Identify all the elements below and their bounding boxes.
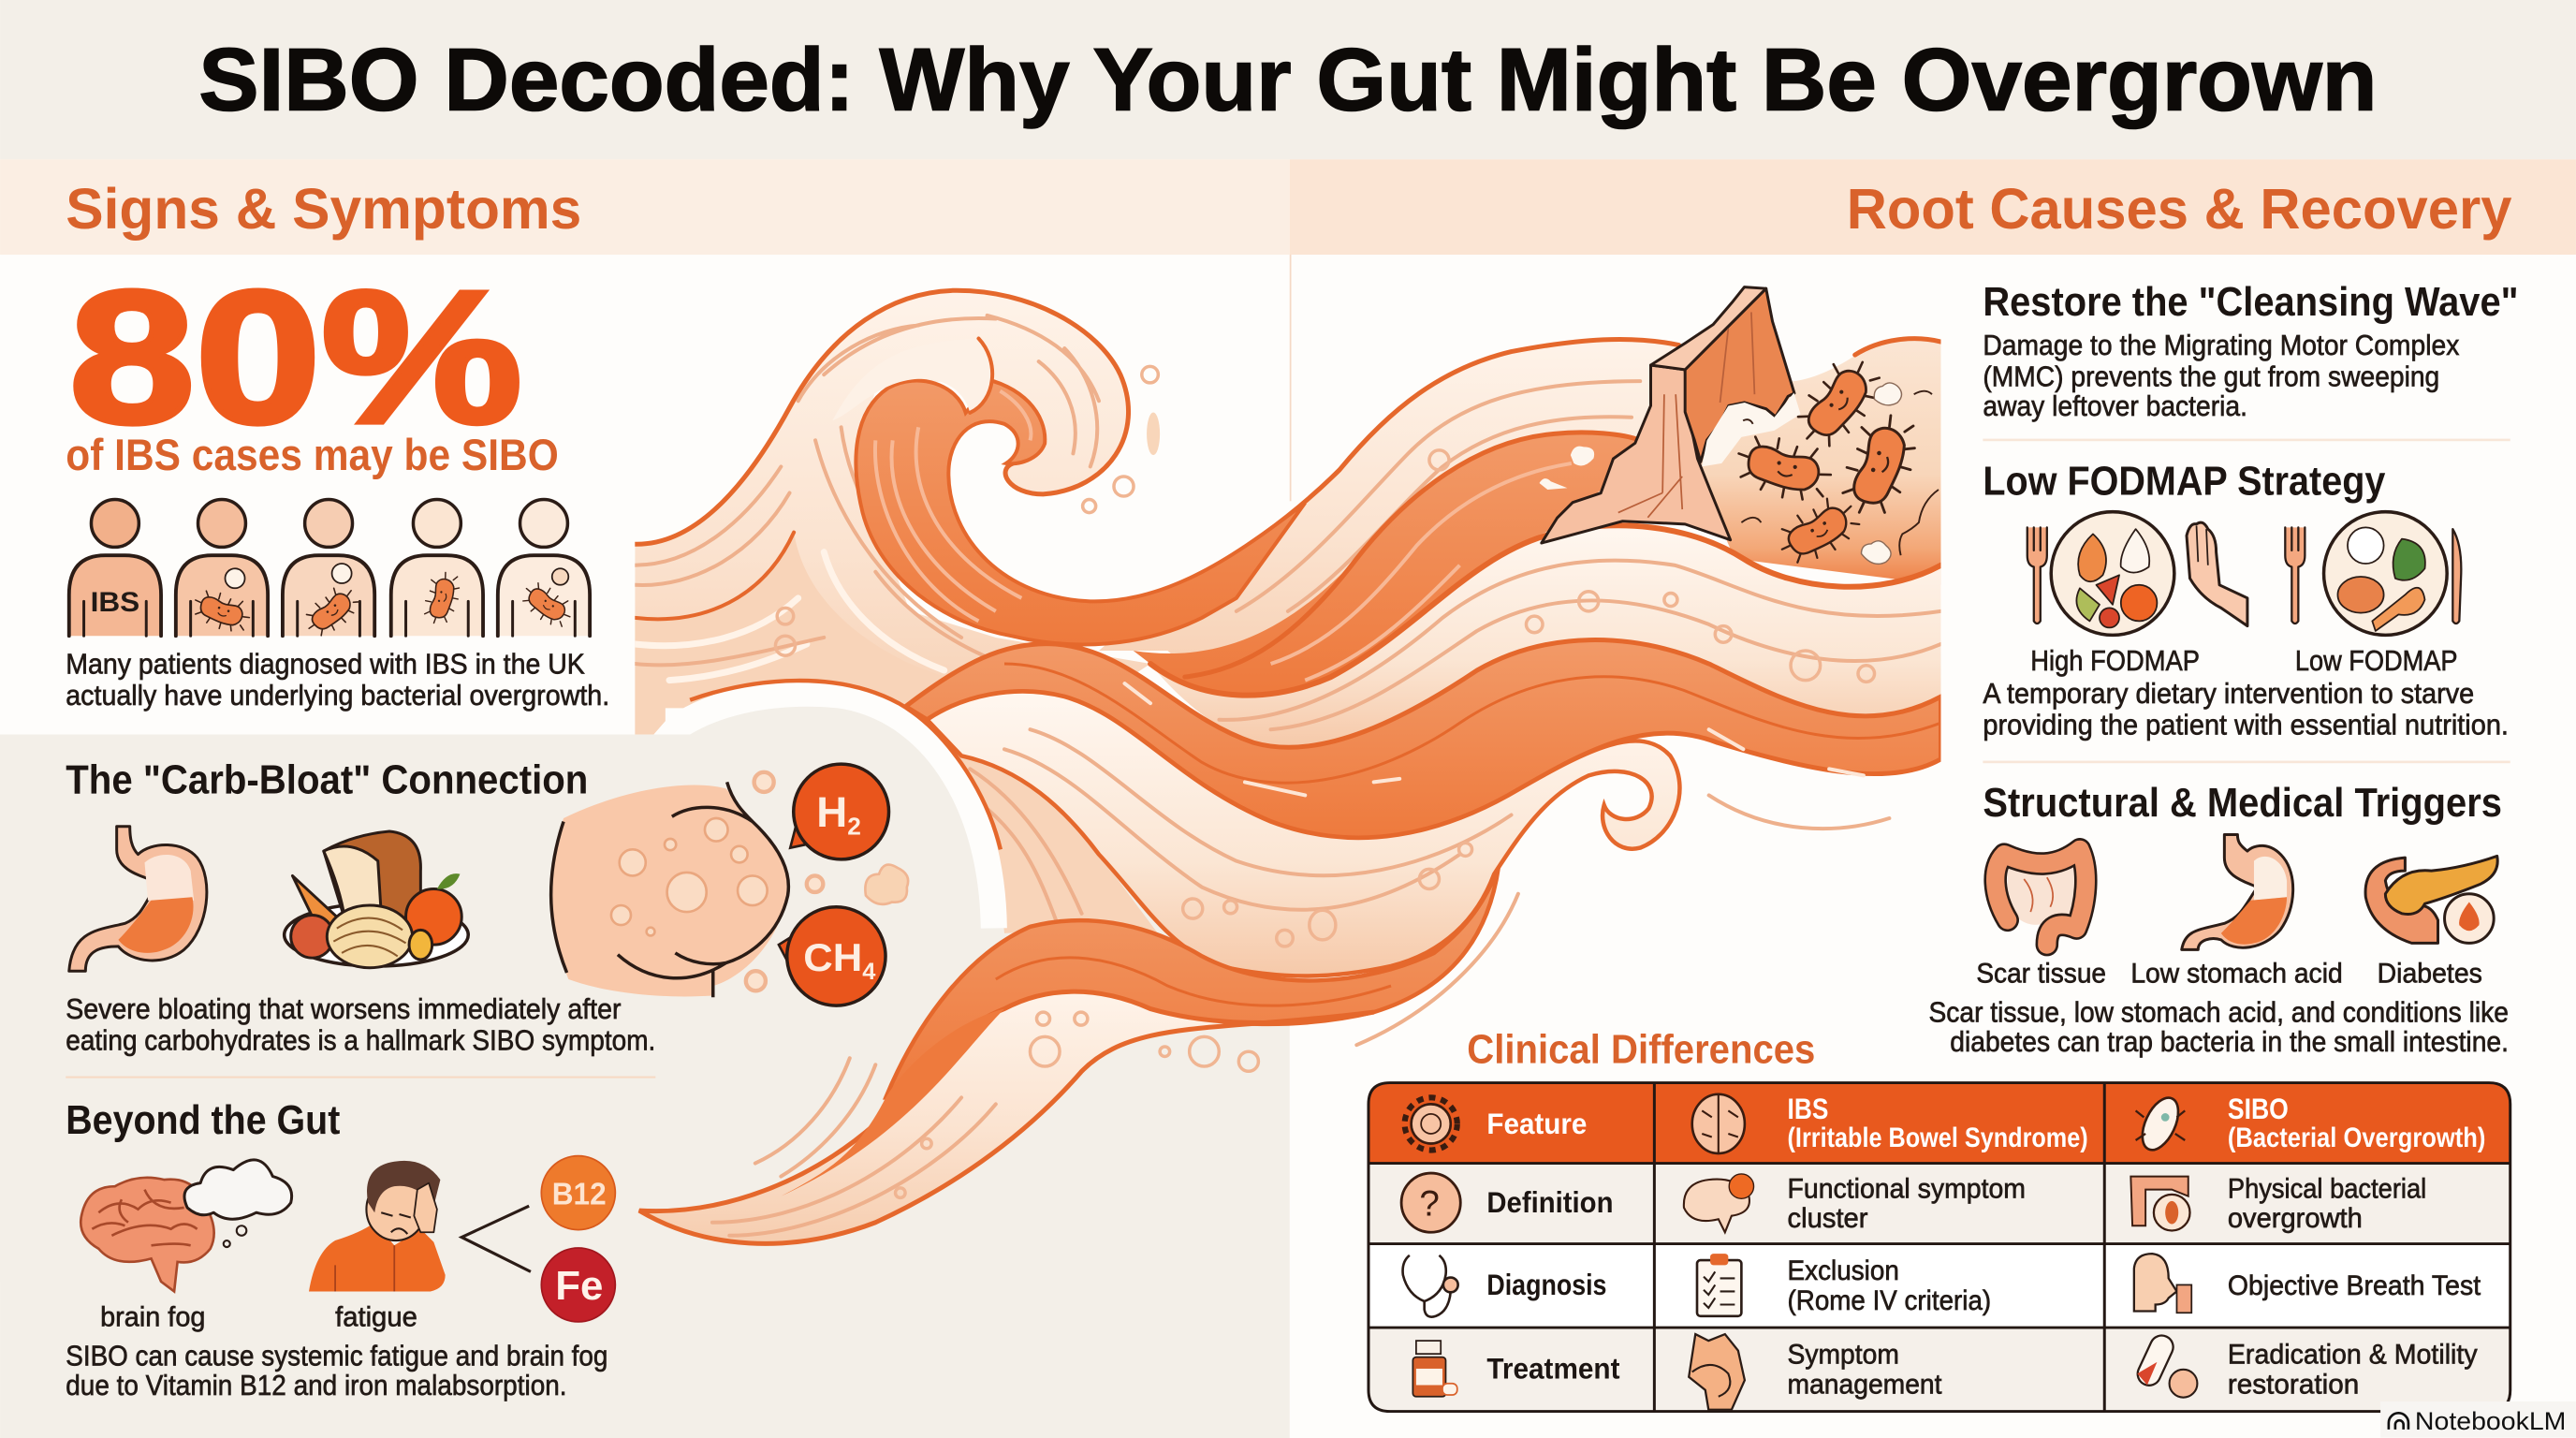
bacteria pocket and cliff — [1540, 287, 1939, 570]
icon: brain with question — [1684, 1174, 1754, 1232]
person: bacteria 1 — [176, 500, 268, 638]
icon: B12: B12 — [552, 1177, 607, 1211]
person: bacteria 2 — [283, 500, 374, 641]
left section header band — [0, 159, 1290, 255]
NotebookLM watermark — [2380, 1401, 2576, 1438]
icon: low FODMAP plate — [2285, 512, 2461, 635]
text: exclusion — [1788, 1255, 1991, 1316]
label: low stomach acid: Low stomach acid — [2130, 959, 2343, 990]
label: low FODMAP: Low FODMAP — [2295, 644, 2458, 677]
text: eradication and motility — [2228, 1340, 2478, 1400]
icon: brain with fog — [80, 1160, 292, 1291]
icon: stop hand — [2187, 522, 2247, 626]
wordmark: NotebookLM — [2415, 1406, 2566, 1435]
icon: colon — [1996, 849, 2086, 945]
white ring and bulge around bloated belly — [0, 681, 1001, 1282]
description — [1983, 677, 2509, 741]
gas puffs and debris — [1540, 383, 1939, 564]
heading: The "Carb-Bloat" Connection — [66, 757, 588, 803]
description: (MMC) prevents the gut from sweeping — [1983, 360, 2439, 392]
icon: torso with hands — [1689, 1334, 1745, 1410]
icon: carb food plate — [285, 831, 468, 968]
icon: gear — [1405, 1097, 1457, 1151]
header: IBS: IBS — [1788, 1092, 1828, 1125]
description: Scar tissue, low stomach acid, and conditions like — [1928, 996, 2509, 1029]
label: treatment: Treatment — [1486, 1351, 1620, 1385]
right section header band — [1290, 159, 2576, 255]
description: diabetes can trap bacteria in the small intestine. — [1950, 1025, 2509, 1058]
icon: pancreas with blood drop — [2365, 856, 2497, 943]
panel: 80 percent stat — [66, 251, 609, 712]
stat description — [66, 648, 609, 712]
icon: stomach — [2182, 835, 2293, 949]
heading: signs and symptoms: Signs & Symptoms — [66, 177, 581, 242]
panel: beyond the gut — [66, 1097, 615, 1401]
icon: bacterium — [2135, 1093, 2186, 1155]
arrow: links to deficiencies — [461, 1206, 531, 1271]
icon: CH4 gas bubble: 4 — [862, 960, 876, 985]
stat description: actually have underlying bacterial overgrowth. — [66, 679, 609, 712]
text: exclusion: Exclusion — [1788, 1255, 1899, 1286]
header: feature: Feature — [1486, 1107, 1587, 1140]
beyond the gut description: due to Vitamin B12 and iron malabsorption. — [66, 1369, 567, 1401]
text: symptom management: management — [1788, 1369, 1942, 1400]
heading: Low FODMAP Strategy — [1983, 458, 2386, 504]
big number: 80% — [69, 251, 522, 462]
icon: clipboard — [1697, 1254, 1741, 1316]
heading: root causes and recovery: Root Causes & Recovery — [1847, 177, 2511, 242]
description — [1928, 996, 2509, 1058]
table row: definition — [1401, 1173, 2426, 1234]
bacterium — [1730, 424, 1837, 510]
panel: low FODMAP strategy — [1983, 458, 2509, 741]
label: brain fog: brain fog — [100, 1301, 205, 1332]
beyond the gut description — [66, 1339, 607, 1401]
icon: CH4 gas bubble — [779, 907, 886, 1005]
icon: iron: Fe — [555, 1263, 603, 1309]
label: scar tissue: Scar tissue — [1976, 959, 2106, 990]
panel: restore the cleansing wave — [1983, 279, 2519, 422]
table row: treatment — [1412, 1332, 2478, 1410]
text: symptom management: Symptom — [1788, 1340, 1899, 1371]
header: SIBO: (Bacterial Overgrowth) — [2228, 1123, 2485, 1153]
heading: Structural & Medical Triggers — [1983, 780, 2502, 826]
label: fatigue: fatigue — [335, 1301, 417, 1332]
wave bubbles — [775, 366, 1875, 1197]
description: A temporary dietary intervention to starve — [1983, 677, 2474, 710]
icon: stomach — [69, 827, 207, 971]
icon: iron — [541, 1248, 615, 1322]
icon: stethoscope — [1403, 1255, 1458, 1317]
description: away leftover bacteria. — [1983, 389, 2247, 422]
header: SIBO — [2228, 1092, 2485, 1153]
heading: clinical differences: Clinical Differences — [1467, 1027, 1815, 1073]
lower left beige panel — [0, 734, 1290, 1438]
icon: high FODMAP plate — [2027, 512, 2174, 635]
person: bacteria 3 — [391, 500, 483, 636]
icon: notebook arcs — [2389, 1413, 2408, 1430]
icon: question mark — [1401, 1173, 1460, 1232]
table rows background — [1368, 1083, 2510, 1412]
icon: H2 gas bubble: 2 — [847, 813, 861, 841]
carb-bloat description — [66, 992, 655, 1056]
icon: brain — [1692, 1094, 1745, 1153]
beyond the gut description: SIBO can cause systemic fatigue and brain fog — [66, 1339, 607, 1372]
bacterium — [1784, 348, 1890, 457]
person: IBS — [69, 500, 161, 636]
label: diabetes: Diabetes — [2378, 959, 2482, 990]
icon: H2 gas bubble — [790, 764, 889, 859]
text: symptom management — [1788, 1340, 1942, 1400]
cliff fold — [1542, 287, 1794, 543]
heading: Beyond the Gut — [66, 1097, 341, 1143]
icon: CH4 gas bubble: CH — [803, 935, 860, 979]
label: definition: Definition — [1486, 1185, 1613, 1219]
central wave illustration: upper bands — [635, 290, 1940, 976]
text: objective breath test: Objective Breath Test — [2228, 1270, 2481, 1301]
icon: question mark: ? — [1419, 1184, 1440, 1225]
stat caption: of IBS cases may be SIBO — [66, 431, 559, 480]
person: IBS: IBS — [91, 587, 139, 618]
description — [1983, 329, 2460, 422]
text: physical bacterial overgrowth — [2228, 1173, 2426, 1234]
people row — [69, 500, 590, 641]
bacterium — [1829, 406, 1927, 524]
panel: structural and medical triggers — [1928, 780, 2509, 1058]
gas dots — [746, 772, 908, 990]
panel: carb-bloat connection — [66, 757, 908, 1056]
text: eradication and motility: restoration — [2228, 1369, 2359, 1400]
table row: diagnosis — [1403, 1254, 2481, 1317]
icon: fatigued person — [309, 1161, 446, 1291]
label: diagnosis: Diagnosis — [1486, 1268, 1606, 1301]
central wave illustration: lower tail — [639, 795, 1889, 1243]
text: exclusion: (Rome IV criteria) — [1788, 1285, 1991, 1316]
icon: B12 — [541, 1156, 615, 1230]
text: functional symptom cluster — [1788, 1173, 2026, 1234]
icon: intestine with magnifier — [2130, 1177, 2190, 1231]
title: SIBO Decoded: Why Your Gut Might Be Overgrown — [198, 31, 2378, 130]
description: providing the patient with essential nutrition. — [1983, 708, 2509, 741]
icon: bloated belly — [551, 782, 788, 997]
label: high FODMAP: High FODMAP — [2030, 644, 2200, 677]
text: functional symptom cluster: Functional symptom — [1788, 1173, 2026, 1204]
icon: breath test — [2134, 1254, 2191, 1313]
person: bacteria 4 — [498, 500, 590, 636]
text: eradication and motility: Eradication & Motility — [2228, 1340, 2478, 1371]
text: physical bacterial overgrowth: overgrowth — [2228, 1203, 2363, 1234]
table header row — [1405, 1092, 2485, 1155]
white plaque — [1702, 392, 1801, 466]
stat description: Many patients diagnosed with IBS in the UK — [66, 648, 585, 681]
icon: medicine bottle — [1412, 1341, 1457, 1397]
comparison table — [1368, 1083, 2510, 1412]
text: functional symptom cluster: cluster — [1788, 1203, 1868, 1234]
header: IBS — [1788, 1092, 2088, 1153]
heading: Restore the "Cleansing Wave" — [1983, 279, 2519, 325]
title band — [0, 0, 2576, 159]
icon: pills — [2134, 1332, 2197, 1398]
description: Damage to the Migrating Motor Complex — [1983, 329, 2460, 361]
header: IBS: (Irritable Bowel Syndrome) — [1788, 1123, 2088, 1153]
icon: H2 gas bubble: H — [816, 788, 847, 836]
carb-bloat description: eating carbohydrates is a hallmark SIBO symptom. — [66, 1023, 655, 1056]
bacterium — [1771, 491, 1865, 570]
text: physical bacterial overgrowth: Physical bacterial — [2228, 1173, 2426, 1204]
carb-bloat description: Severe bloating that worsens immediately after — [66, 992, 621, 1025]
header: SIBO: SIBO — [2228, 1092, 2289, 1125]
